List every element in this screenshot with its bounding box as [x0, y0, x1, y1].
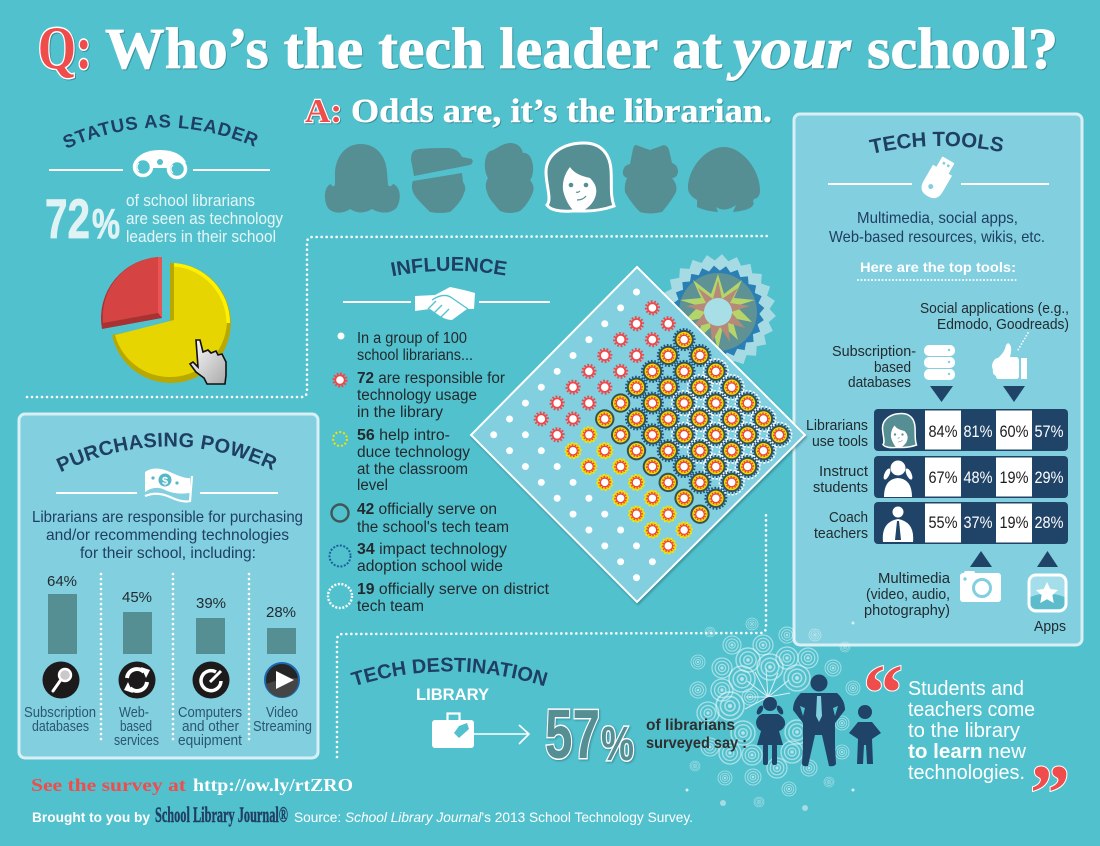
icon: boy — [849, 705, 881, 764]
stat: 57%: % — [601, 718, 634, 771]
icon: student — [882, 460, 914, 497]
concentric circles cluster — [686, 618, 860, 811]
icon: camera — [960, 571, 1001, 602]
quote: students and teachers: Students and — [908, 678, 1024, 700]
column: video streaming: 28% — [266, 604, 296, 621]
label: social applications: Edmodo, Goodreads) — [937, 316, 1069, 333]
icon: money — [145, 468, 192, 502]
dotted frame: influence — [27, 236, 767, 397]
label: subscription-based databases: databases — [848, 374, 911, 391]
icon: teacher — [883, 506, 913, 542]
chart: pie 72% — [101, 257, 231, 384]
icon: refresh — [118, 662, 156, 698]
text: tools description: Web-based resources, wikis, etc. — [829, 229, 1045, 246]
column: web-based services: based — [120, 718, 152, 735]
icon: thumbs up — [992, 343, 1027, 379]
legend: 34 — [330, 541, 507, 575]
label: apps: Apps — [1034, 618, 1066, 635]
label: subscription-based databases — [832, 343, 916, 391]
title: question: school? — [867, 16, 1058, 81]
icon: hand cursor — [190, 340, 226, 384]
icon: binoculars — [134, 150, 186, 178]
column: video streaming — [253, 604, 312, 735]
label: subscription-based databases: Subscription- — [832, 343, 916, 360]
legend: group of 100: In a group of 100 — [357, 330, 467, 347]
footer: survey link: See the survey at — [31, 775, 186, 795]
legend: group of 100 — [338, 330, 473, 364]
icon: librarian face — [546, 143, 614, 212]
row: instruct students: 19% — [1000, 469, 1029, 487]
legend: 72 — [334, 370, 505, 421]
column: video streaming: Streaming — [253, 718, 312, 735]
row: librarians use tools: use tools — [812, 433, 868, 450]
dotted frame: tech destination — [337, 513, 766, 757]
column: subscription databases: Subscription — [24, 704, 96, 721]
icon: face 3 — [485, 143, 534, 213]
quote: students and teachers: teachers come — [908, 699, 1035, 721]
footer: survey link — [31, 775, 353, 795]
row: coach teachers: 19% — [1000, 514, 1029, 532]
footer: credits: School Library Journal® — [155, 802, 288, 827]
legend: 34: 34 impact technology — [357, 541, 507, 558]
legend: 34: adoption school wide — [357, 558, 503, 575]
text: status description: leaders in their school — [126, 227, 276, 246]
label: social applications — [920, 300, 1069, 333]
row: librarians use tools: 81% — [964, 423, 993, 441]
text: status description: of school librarians — [126, 191, 255, 210]
text: purchasing description: Librarians are responsible for purchasing — [32, 509, 303, 526]
panel: tech destination — [350, 658, 636, 773]
panel: tech tools — [792, 112, 1084, 646]
row: librarians use tools: Librarians — [806, 417, 868, 434]
row: librarians use tools — [806, 409, 1068, 451]
legend: 56: 56 help intro- — [357, 427, 450, 444]
footer: survey link: http://ow.ly/rtZRO — [193, 775, 353, 795]
legend: 42: 42 officially serve on — [357, 501, 497, 518]
icon: database — [924, 345, 955, 380]
row of faces — [325, 143, 760, 214]
column: web-based services: services — [114, 732, 159, 749]
column: subscription databases: databases — [32, 718, 89, 735]
legend: 19 — [328, 581, 550, 615]
arrow: social down — [1003, 386, 1025, 402]
label: library: LIBRARY — [416, 685, 490, 704]
legend: 56: level — [357, 477, 388, 494]
text: purchasing description: and/or recommending technologies — [46, 527, 289, 544]
chart: diamond of 100 librarians — [471, 267, 805, 602]
quote: students and teachers — [863, 650, 1070, 838]
icon: gauge — [192, 662, 230, 698]
subtitle: answer: A: — [305, 93, 342, 130]
column: web-based services — [114, 589, 159, 749]
icon: magnifier — [42, 662, 80, 698]
label: multimedia: photography) — [864, 602, 950, 619]
icon: play — [265, 663, 299, 697]
legend: 72: technology usage — [357, 387, 477, 404]
row: coach teachers: 37% — [964, 514, 993, 532]
text: of librarians surveyed say: of librarians — [646, 717, 735, 734]
quote: students and teachers: technologies. — [908, 762, 1025, 784]
subheading: top tools: Here are the top tools: — [860, 259, 1016, 275]
row: instruct students: students — [813, 479, 868, 496]
column: computers and other equipment — [178, 595, 243, 749]
column: subscription databases — [24, 573, 96, 735]
icon: face 1 — [325, 144, 400, 213]
label: subscription-based databases: based — [874, 359, 911, 376]
icon: usb drive — [918, 154, 958, 202]
legend: 19: 19 officially serve on district — [357, 581, 550, 598]
column: video streaming: Video — [266, 704, 298, 721]
row: instruct students: 67% — [928, 469, 958, 487]
heading: tech tools: TECH TOOLS — [868, 132, 1004, 153]
footer: credits: Brought to you by — [32, 809, 150, 825]
text: tools description — [829, 210, 1045, 246]
column: computers and other equipment: and other — [182, 718, 239, 735]
stat: 57%: 57 — [545, 695, 600, 773]
stat: 72%: 72 — [45, 187, 90, 250]
icon: face 5 — [623, 145, 678, 214]
row: coach teachers: 28% — [1034, 514, 1064, 532]
legend: 56: duce technology — [357, 444, 470, 461]
stat: 72%: % — [92, 200, 120, 247]
heading: status as leader: STATUS AS LEADER — [63, 114, 258, 148]
row: instruct students: 48% — [964, 469, 993, 487]
row: coach teachers: 55% — [928, 514, 958, 532]
legend: 72: in the library — [357, 404, 443, 421]
label: multimedia — [864, 570, 951, 619]
icon: face 6 — [688, 147, 760, 212]
icon: girl — [755, 697, 785, 765]
legend: 72: 72 are responsible for — [357, 370, 505, 387]
icon: opening quote: “ — [863, 650, 903, 738]
title: question — [38, 15, 1058, 81]
legend: 42 — [332, 501, 509, 536]
icon: handshake — [415, 287, 475, 320]
column: web-based services: 45% — [122, 589, 152, 606]
column: computers and other equipment: 39% — [196, 595, 226, 612]
row: librarians use tools: 84% — [928, 423, 958, 441]
title: question: your — [727, 16, 851, 81]
label: multimedia: (video, audio, — [866, 586, 950, 603]
row: instruct students: Instruct — [819, 463, 869, 480]
footer: credits — [32, 802, 693, 827]
text: purchasing description — [32, 509, 303, 562]
column: computers and other equipment: equipment — [178, 732, 243, 749]
text: status description: are seen as technology — [126, 209, 283, 228]
heading: purchasing power: PURCHASING POWER — [56, 432, 276, 472]
footer: credits: Source: School Library Journal’s 2013 School Technology Survey. — [294, 809, 693, 825]
quote: students and teachers: to learn new — [908, 741, 1027, 763]
panel: status as leader — [45, 114, 283, 385]
legend: 56 — [333, 427, 470, 494]
column: subscription databases: 64% — [47, 573, 77, 590]
text: of librarians surveyed say: surveyed say : — [646, 735, 747, 752]
arrow: databases down — [930, 386, 953, 402]
figures: girl, man and boy — [755, 674, 881, 766]
arrow: apps up — [1037, 551, 1058, 567]
text: tools description: Multimedia, social apps, — [857, 210, 1018, 227]
icon: face 2 with cap — [411, 148, 473, 213]
icon: apps star — [1029, 575, 1066, 611]
icon: closing quote: ” — [1030, 750, 1070, 838]
arrow: library to 57% — [474, 725, 529, 744]
icon: librarian small — [882, 414, 916, 448]
row: coach teachers — [814, 502, 1068, 544]
legend: group of 100: school librarians... — [357, 347, 473, 364]
row: instruct students: 29% — [1034, 469, 1064, 487]
arrow: multimedia up — [970, 551, 992, 567]
title: question: Who’s the tech leader at — [105, 16, 723, 81]
row: librarians use tools: 60% — [1000, 423, 1029, 441]
heading: tech destination: TECH DESTINATION — [350, 658, 548, 686]
heading: influence: INFLUENCE — [391, 256, 507, 276]
legend: 19: tech team — [357, 598, 424, 615]
column: computers and other equipment: Computers — [178, 704, 242, 721]
row: librarians use tools: 57% — [1034, 423, 1064, 441]
icon: man — [793, 674, 845, 766]
text: of librarians surveyed say — [646, 717, 747, 752]
column: web-based services: Web- — [119, 704, 149, 721]
title: question: Q: — [38, 15, 92, 81]
row: coach teachers: teachers — [814, 525, 868, 542]
label: social applications: Social applications (e.g., — [920, 300, 1069, 317]
legend: 56: at the classroom — [357, 461, 468, 478]
subtitle: answer: Odds are, it’s the librarian. — [351, 93, 772, 130]
row: instruct students — [813, 456, 1068, 498]
text: purchasing description: for their school, including: — [80, 545, 256, 562]
legend: 42: the school's tech team — [357, 519, 509, 536]
icon: money: $ — [162, 476, 168, 488]
icon: suitcase — [432, 714, 474, 748]
row: coach teachers: Coach — [829, 509, 868, 526]
quote: students and teachers: to the library — [908, 720, 1020, 742]
label: multimedia: Multimedia — [878, 570, 951, 587]
starburst behind diamond — [656, 250, 780, 374]
panel: influence legend — [326, 256, 550, 615]
panel: purchasing power — [18, 412, 320, 760]
text: status description — [126, 191, 283, 246]
